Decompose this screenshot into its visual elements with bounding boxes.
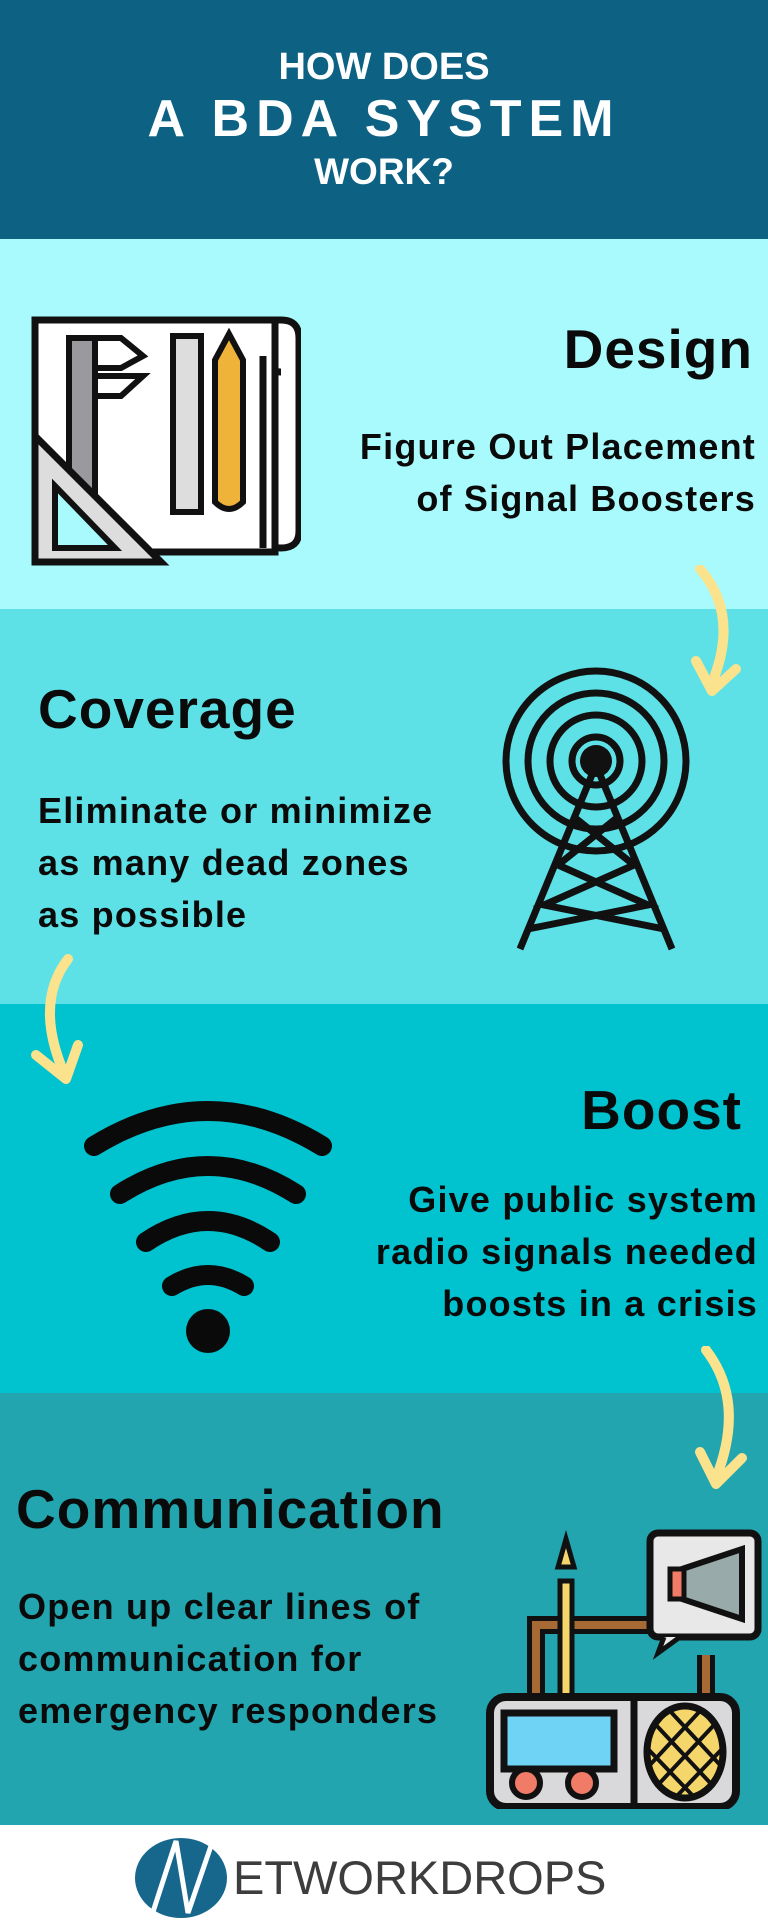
text: communication description: Open up clear lines of xyxy=(18,1586,420,1627)
text: communication description: communication for xyxy=(18,1638,362,1679)
heading: boost: Boost xyxy=(581,1079,742,1141)
title: WORK? xyxy=(314,151,454,192)
text: design description xyxy=(360,426,756,519)
panel: communication xyxy=(0,1393,768,1825)
icon: blueprint tools xyxy=(32,316,301,566)
text: communication description xyxy=(18,1586,438,1731)
heading: design: Design xyxy=(564,318,753,380)
heading: coverage: Coverage xyxy=(38,678,297,740)
icon: logo mark xyxy=(135,1838,227,1918)
panel: boost xyxy=(0,1004,768,1393)
text: coverage description: Eliminate or minimize xyxy=(38,790,433,831)
title: A BDA SYSTEM xyxy=(147,90,621,148)
icon: wifi xyxy=(84,1101,332,1353)
title xyxy=(147,46,621,192)
header xyxy=(0,0,768,239)
arrow: boost to communication xyxy=(695,1346,747,1489)
text: boost description: Give public system xyxy=(408,1179,758,1220)
panel: design xyxy=(0,239,768,609)
text: design description: Figure Out Placement xyxy=(360,426,756,467)
title: HOW DOES xyxy=(278,46,490,88)
arrow: coverage to boost xyxy=(31,954,83,1084)
text: boost description: radio signals needed xyxy=(376,1231,758,1272)
text: boost description xyxy=(376,1179,758,1324)
text: coverage description: as many dead zones xyxy=(38,842,410,883)
text: coverage description: as possible xyxy=(38,894,247,935)
text: design description: of Signal Boosters xyxy=(416,478,756,519)
footer: logo xyxy=(0,1825,768,1920)
heading: communication: Communication xyxy=(16,1478,445,1540)
panel: coverage xyxy=(0,609,768,1004)
icon: radio tower xyxy=(502,668,690,950)
text: brand name: ETWORKDROPS xyxy=(233,1851,606,1904)
arrow: design to coverage xyxy=(691,565,741,696)
icon: radio with megaphone xyxy=(486,1530,762,1809)
text: communication description: emergency responders xyxy=(18,1690,438,1731)
text: boost description: boosts in a crisis xyxy=(442,1283,758,1324)
text: coverage description xyxy=(38,790,433,935)
